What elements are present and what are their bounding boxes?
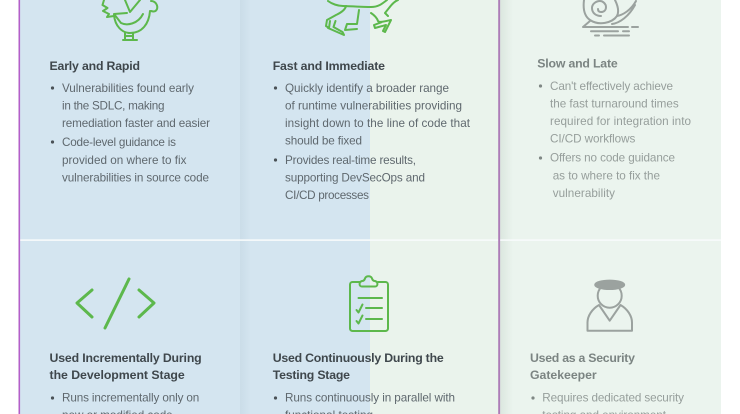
bullet list: Offers no code guidance: [550, 151, 675, 164]
bullet list: Vulnerabilities found early: [62, 82, 194, 95]
bullet list: Quickly identify a broader range: [285, 82, 449, 95]
icon: chicken: [102, 0, 157, 40]
heading: Testing Stage: [273, 368, 350, 382]
bullet list: Runs incrementally only on: [62, 392, 199, 405]
panel: used continuously: [273, 276, 455, 414]
bullet list: vulnerabilities in source code: [62, 172, 209, 184]
panel: early and rapid: [50, 0, 210, 184]
icon: code brackets: [77, 279, 154, 328]
bullet list: required for integration into: [550, 115, 691, 128]
bullet list: Provides real-time results,: [285, 154, 416, 167]
bullet list: CI/CD processes: [285, 189, 369, 202]
bullet list: of runtime vulnerabilities providing: [285, 100, 462, 113]
bullet list: in the SDLC, making: [62, 100, 164, 113]
icon: snail: [583, 0, 638, 36]
panel: security gatekeeper: [530, 281, 684, 414]
bullet list: provided on where to fix: [62, 154, 187, 167]
icon: clipboard checklist: [350, 276, 388, 331]
bullet list: [51, 82, 210, 184]
bullet list: CI/CD workflows: [550, 132, 635, 145]
bullet list: [274, 392, 455, 414]
heading: [50, 351, 202, 382]
bullet list: [539, 80, 691, 200]
bullet list: Can't effectively achieve: [550, 80, 673, 93]
icon: running horse: [326, 0, 398, 35]
heading: [273, 351, 444, 382]
heading: Slow and Late: [537, 57, 618, 71]
bullet list: as to where to fix the: [553, 169, 660, 182]
bullet list: Runs continuously in parallel with: [285, 392, 455, 405]
icon: security guard: [588, 281, 632, 331]
panel: used incrementally: [50, 279, 202, 414]
bullet list: [274, 82, 471, 202]
bullet list: supporting DevSecOps and: [285, 172, 425, 184]
bullet list: remediation faster and easier: [62, 117, 210, 130]
highlighted frame: purple side borders: [18, 0, 500, 414]
heading: Used as a Security: [530, 351, 635, 365]
heading: Used Continuously During the: [273, 351, 444, 365]
heading: Early and Rapid: [50, 59, 140, 73]
heading: [530, 351, 635, 382]
bullet list: should be fixed: [285, 134, 362, 148]
heading: Fast and Immediate: [273, 59, 385, 73]
bullet list: [51, 392, 199, 414]
bullet list: Requires dedicated security: [542, 392, 684, 405]
bullet list: insight down to the line of code that: [285, 117, 471, 130]
panel: fast and immediate: [273, 0, 471, 202]
bullet list: the fast turnaround times: [550, 97, 679, 110]
bullet list: [531, 392, 684, 414]
heading: the Development Stage: [50, 368, 185, 382]
bullet list: vulnerability: [553, 187, 615, 200]
panel: slow and late: [537, 0, 691, 200]
bullet list: Code-level guidance is: [62, 136, 176, 149]
heading: Gatekeeper: [530, 368, 597, 382]
heading: Used Incrementally During: [50, 351, 202, 365]
